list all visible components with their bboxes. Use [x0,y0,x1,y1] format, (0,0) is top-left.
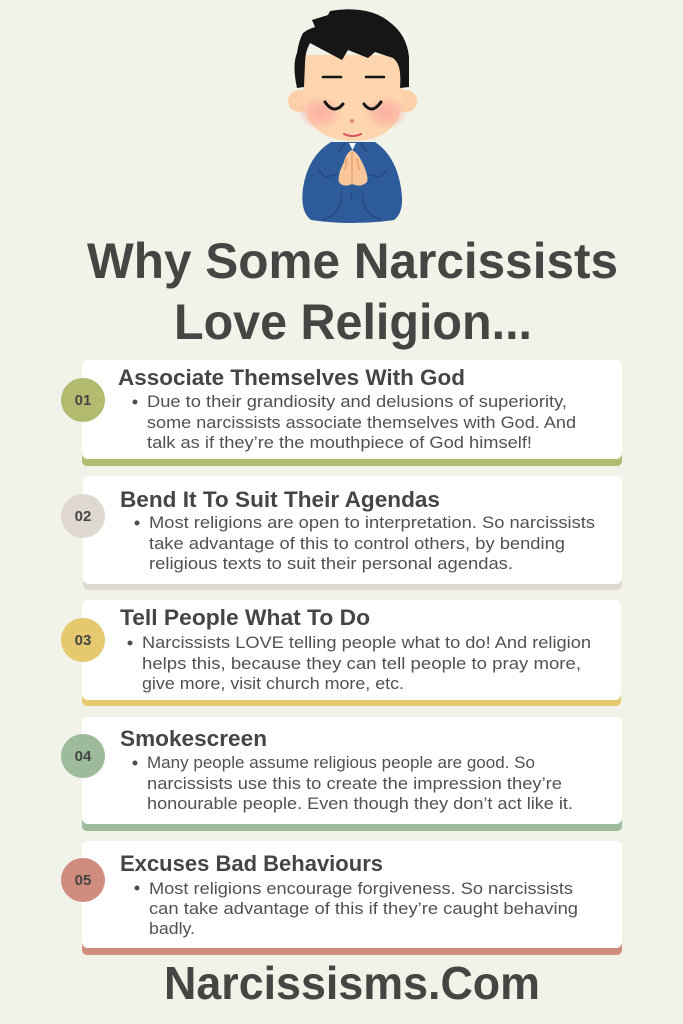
panel: 02 bend it to suit their agendas: take advantage of this to control others, by bending [149,534,565,553]
closed eyes [325,102,381,109]
panel: 05 excuses bad behaviours: badly. [149,919,195,938]
panel: 01 associate themselves with God: Associate Themselves With God [118,365,465,390]
face [303,55,403,141]
panel: 05 excuses bad behaviours: Excuses Bad Behaviours [120,851,383,876]
title: Why Some Narcissists [87,233,618,289]
footer: site name: Narcissisms.Com [164,957,540,1009]
panel: 01 associate themselves with God: talk as if they’re the mouthpiece of God himself! [147,433,532,452]
panel: 04 smokescreen [61,717,622,831]
panel: 01 associate themselves with God: some narcissists associate themselves with God. And [147,413,576,432]
eyebrows [323,76,384,78]
panel: 01 associate themselves with God: Due to their grandiosity and delusions of superiority, [147,392,567,411]
icon: praying man [288,9,417,223]
panel: 02 bend it to suit their agendas [61,476,622,590]
nose and mouth [350,119,354,123]
panel: 04 smokescreen: narcissists use this to create the impression they’re [147,774,562,793]
hair [294,9,409,88]
panel: 03 tell people what to do: Tell People What To Do [120,605,370,630]
panel: 05 excuses bad behaviours [61,841,622,955]
ears [288,90,310,112]
panel: 02 bend it to suit their agendas: 02 [75,508,91,525]
praying hands [339,150,367,186]
panel: 04 smokescreen: 04 [75,748,92,765]
panel: 05 excuses bad behaviours: 05 [75,872,91,889]
panel: 03 tell people what to do: helps this, because they can tell people to pray more, [142,654,581,673]
title [87,233,618,350]
panel: 05 excuses bad behaviours: Most religions encourage forgiveness. So narcissists [149,879,573,898]
panel: 02 bend it to suit their agendas: religious texts to suit their personal agendas. [149,554,513,573]
panel: 03 tell people what to do: give more, visit church more, etc. [142,674,404,693]
body [302,142,402,223]
panel: 04 smokescreen: Many people assume religious people are good. So [147,753,535,772]
title: Love Religion... [174,294,532,350]
panel: 03 tell people what to do [61,600,621,706]
panel: 05 excuses bad behaviours: can take advantage of this if they’re caught behaving [149,899,578,918]
cheeks [298,96,342,130]
panel: 03 tell people what to do: 03 [75,632,91,649]
panel: 01 associate themselves with God: 01 [75,392,91,409]
panel: 01 associate themselves with God [61,360,622,466]
panel: 03 tell people what to do: Narcissists LOVE telling people what to do! And religion [142,633,591,652]
panel: 04 smokescreen: Smokescreen [120,726,267,751]
panel: 04 smokescreen: honourable people. Even though they don’t act like it. [147,794,573,813]
panel: 02 bend it to suit their agendas: Bend It To Suit Their Agendas [120,487,440,512]
panel: 02 bend it to suit their agendas: Most religions are open to interpretation. So narcissists [149,513,595,532]
